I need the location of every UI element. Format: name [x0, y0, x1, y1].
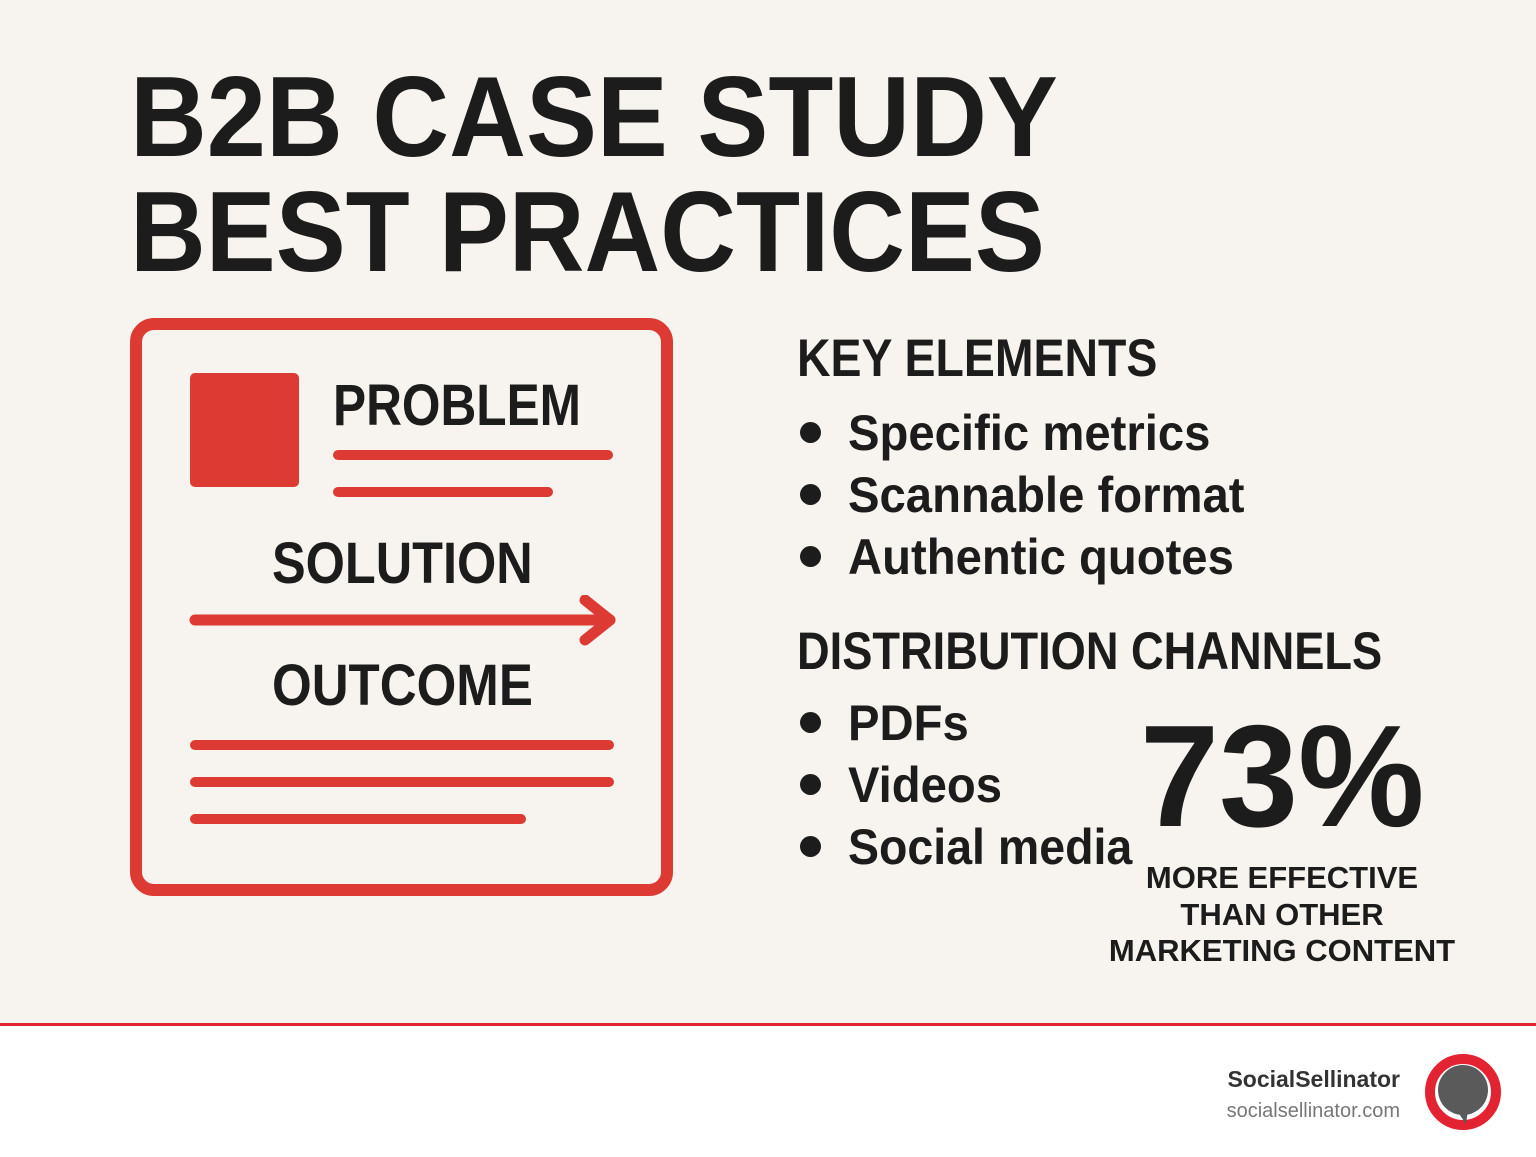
list: channels: Social media	[848, 819, 1132, 875]
panel: case study card	[130, 318, 673, 896]
list: key elements	[800, 405, 1244, 585]
icon: logo	[1425, 1054, 1501, 1130]
list: channels: PDFs	[848, 695, 969, 751]
list: key elements: Specific metrics	[848, 405, 1210, 461]
stat caption: THAN OTHER	[1180, 896, 1384, 932]
title: BEST PRACTICES	[130, 169, 1045, 296]
heading: distribution channels: DISTRIBUTION CHANNELS	[797, 622, 1382, 681]
title: B2B CASE STUDY	[130, 54, 1058, 181]
title	[130, 54, 1058, 296]
stat caption: MARKETING CONTENT	[1109, 933, 1455, 968]
list: channels	[800, 695, 1133, 875]
icon: red square	[190, 373, 299, 487]
heading: outcome: OUTCOME	[272, 653, 533, 718]
problem lines	[333, 450, 613, 497]
stat caption: MORE EFFECTIVE	[1146, 860, 1418, 895]
brand name: SocialSellinator	[1227, 1066, 1400, 1092]
brand url: socialsellinator.com	[1227, 1100, 1400, 1122]
stat: 73%: 73%	[1140, 695, 1424, 857]
list: key elements: Scannable format	[848, 467, 1244, 523]
arrow	[190, 595, 616, 646]
heading: problem: PROBLEM	[333, 373, 581, 438]
list: channels: Videos	[848, 757, 1002, 813]
outcome lines	[190, 740, 614, 824]
footer	[0, 1023, 1536, 1157]
stat caption	[1109, 860, 1455, 968]
list: key elements: Authentic quotes	[848, 529, 1234, 585]
stat: 73%	[1109, 695, 1455, 968]
heading: key elements: KEY ELEMENTS	[797, 329, 1157, 388]
heading: solution: SOLUTION	[272, 531, 533, 596]
